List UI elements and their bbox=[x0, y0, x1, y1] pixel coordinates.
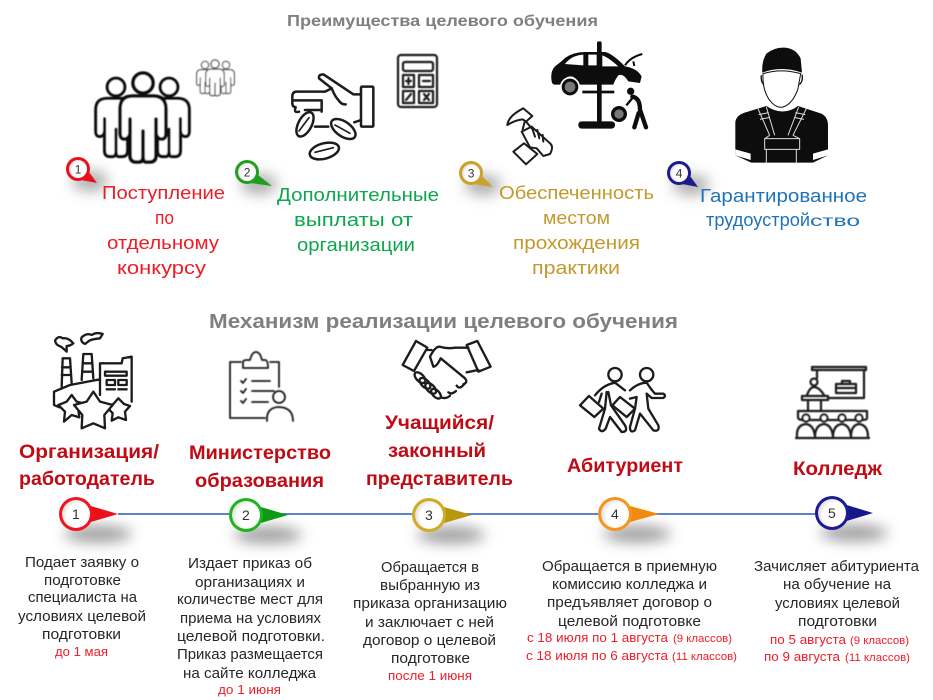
pin 3: 3 bbox=[468, 166, 475, 180]
text: step 5: (11 классов) bbox=[845, 652, 910, 664]
timeline pin 4 bbox=[598, 497, 671, 542]
text: step 2: до 1 июня bbox=[218, 682, 281, 697]
text: step 3 bbox=[353, 560, 507, 683]
text: step 3: приказа организацию bbox=[353, 596, 507, 612]
pin 2: 2 bbox=[244, 166, 251, 180]
heading: organization bbox=[19, 442, 160, 490]
heading: organization: работодатель bbox=[19, 469, 155, 490]
text: step 2 bbox=[177, 556, 325, 697]
pin 3 bbox=[459, 161, 501, 195]
icon: calculator bbox=[398, 55, 437, 107]
text: step 4: предъявляет договор о bbox=[547, 595, 712, 611]
text: advantage 1 bbox=[102, 182, 225, 278]
text: advantage 2 bbox=[277, 184, 439, 255]
text: step 2: организациях и bbox=[195, 575, 305, 591]
timeline pin 1: 1 bbox=[72, 506, 80, 522]
text: advantage 3: Обеспеченность bbox=[499, 182, 654, 203]
text: step 4: с 18 июля по 6 августа bbox=[526, 648, 669, 663]
text: step 3: Обращается в bbox=[381, 560, 479, 576]
timeline pin 1 bbox=[59, 497, 132, 542]
text: step 1: подготовке bbox=[44, 573, 121, 589]
text: advantage 1: Поступление bbox=[102, 182, 225, 203]
text: step 5: условиях целевой bbox=[775, 596, 900, 612]
timeline pin 5: 5 bbox=[828, 505, 836, 521]
text: step 2: на сайте колледжа bbox=[183, 666, 317, 682]
timeline pin 2 bbox=[229, 498, 302, 543]
icon: small group of people bbox=[197, 60, 234, 96]
text: advantage 3: прохождения bbox=[513, 232, 640, 253]
text: advantage 1: отдельному bbox=[107, 232, 220, 253]
heading: student: Учащийся/ bbox=[385, 413, 495, 434]
text: advantage 3 bbox=[499, 182, 654, 278]
pin 2 bbox=[235, 160, 277, 194]
text: step 1: Подает заявку о bbox=[25, 555, 139, 571]
pin 4: 4 bbox=[676, 166, 683, 180]
text: step 1: до 1 мая bbox=[55, 644, 108, 659]
timeline pin 2: 2 bbox=[242, 507, 250, 523]
text: advantage 4: Гарантированное bbox=[700, 185, 867, 206]
icon: worker bbox=[735, 48, 828, 163]
text: advantage 4: трудоустрой bbox=[706, 209, 810, 230]
timeline pin 3 bbox=[412, 498, 485, 543]
text: step 4: (9 классов) bbox=[673, 633, 732, 645]
text: step 4: (11 классов) bbox=[672, 651, 737, 663]
title: advantages: Преимущества целевого обучения bbox=[287, 13, 598, 30]
text: advantage 1: конкурсу bbox=[117, 257, 207, 278]
heading: college: Колледж bbox=[793, 459, 883, 480]
text: step 3: выбранную из bbox=[380, 578, 480, 594]
text: step 2: количестве мест для bbox=[177, 592, 323, 608]
text: step 1 bbox=[18, 555, 146, 659]
icon: walking people bbox=[580, 368, 665, 432]
text: step 2: Приказ размещается bbox=[177, 647, 323, 663]
text: step 4: с 18 июля по 1 августа bbox=[527, 630, 669, 645]
icon: hand holding hammer bbox=[507, 108, 552, 164]
icon: classroom bbox=[796, 367, 869, 438]
text: advantage 4: ство bbox=[810, 213, 860, 230]
icon: hand with coins bbox=[292, 74, 373, 162]
icon: handshake bbox=[403, 341, 491, 400]
heading: student: представитель bbox=[366, 469, 513, 490]
icon: clipboard bbox=[230, 352, 293, 421]
text: step 1: специалиста на bbox=[28, 590, 138, 606]
text: step 5: (9 классов) bbox=[850, 635, 909, 647]
heading: ministry bbox=[189, 443, 331, 492]
heading: ministry: образования bbox=[195, 471, 324, 492]
title: mechanism: Механизм реализации целевого обучения bbox=[209, 310, 678, 333]
text: step 4: целевой подготовке bbox=[558, 614, 701, 630]
icon: factory bbox=[54, 333, 132, 428]
text: advantage 3: практики bbox=[532, 257, 620, 278]
text: step 1: подготовки bbox=[42, 627, 121, 643]
text: advantage 4 bbox=[700, 185, 867, 230]
text: step 2: целевой подготовки. bbox=[177, 629, 325, 645]
text: step 3: договор о целевой bbox=[363, 633, 496, 649]
text: step 4 bbox=[526, 559, 737, 663]
heading: ministry: Министерство bbox=[189, 443, 331, 464]
text: step 5: по 5 августа bbox=[770, 632, 847, 647]
pin 1: 1 bbox=[75, 162, 82, 176]
pin 4 bbox=[667, 161, 709, 195]
text: step 3: подготовке bbox=[391, 651, 470, 667]
text: step 3: и заключает с ней bbox=[365, 615, 494, 631]
heading: student: законный bbox=[388, 441, 486, 462]
text: advantage 1: по bbox=[155, 207, 174, 228]
text: step 5 bbox=[754, 559, 920, 664]
timeline pin 4: 4 bbox=[611, 506, 619, 522]
pin 1 bbox=[66, 157, 108, 191]
timeline pin 3: 3 bbox=[425, 507, 433, 523]
text: step 5: Зачисляет абитуриента bbox=[754, 559, 920, 575]
icon: car on lift with mechanic bbox=[551, 41, 646, 129]
text: advantage 2: Дополнительные bbox=[277, 184, 439, 205]
text: step 1: условиях целевой bbox=[18, 609, 146, 625]
icon: group of people bbox=[96, 73, 189, 162]
text: step 2: приема на условиях bbox=[180, 611, 322, 627]
text: step 5: подготовки bbox=[798, 614, 877, 630]
text: advantage 2: выплаты от bbox=[294, 209, 414, 230]
text: advantage 3: местом bbox=[543, 207, 610, 228]
text: step 4: комиссию колледжа и bbox=[552, 577, 707, 593]
timeline pin 5 bbox=[815, 496, 888, 541]
text: step 2: Издает приказ об bbox=[188, 556, 312, 572]
heading: applicant: Абитуриент bbox=[567, 456, 683, 477]
heading: student bbox=[366, 413, 513, 490]
text: advantage 2: организации bbox=[297, 234, 415, 255]
text: step 4: Обращается в приемную bbox=[542, 559, 717, 575]
text: step 5: на обучение на bbox=[783, 577, 892, 593]
text: step 5: по 9 августа bbox=[764, 649, 841, 664]
timeline line bbox=[118, 513, 830, 515]
text: step 3: после 1 июня bbox=[388, 668, 472, 683]
heading: organization: Организация/ bbox=[19, 442, 160, 463]
